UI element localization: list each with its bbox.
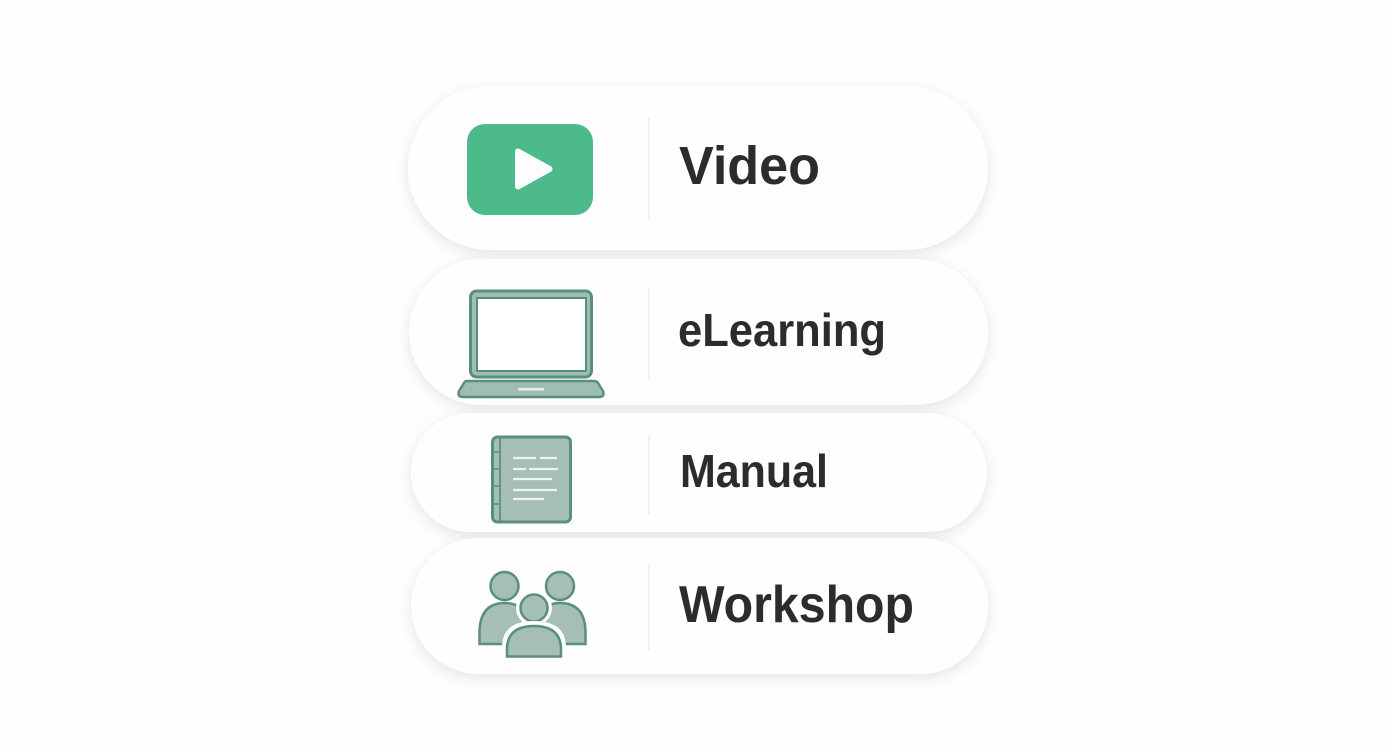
label: eLearning: eLearning	[678, 304, 886, 356]
panel: Workshop	[411, 538, 988, 674]
icon: group of people	[480, 572, 586, 660]
pill card: eLearning	[409, 259, 988, 405]
panel: Video	[408, 86, 988, 250]
panel: eLearning	[409, 259, 988, 405]
pill card: Video	[408, 86, 988, 250]
label: Workshop: Workshop	[679, 576, 914, 634]
icon: laptop	[458, 291, 604, 397]
pill card: Workshop	[411, 538, 988, 674]
pill card: Manual	[411, 413, 987, 532]
icon: video play button	[467, 124, 593, 215]
label: Manual: Manual	[680, 445, 828, 497]
panel: Manual	[411, 413, 987, 532]
label: Video: Video	[679, 136, 820, 196]
icon: manual book	[492, 437, 570, 522]
